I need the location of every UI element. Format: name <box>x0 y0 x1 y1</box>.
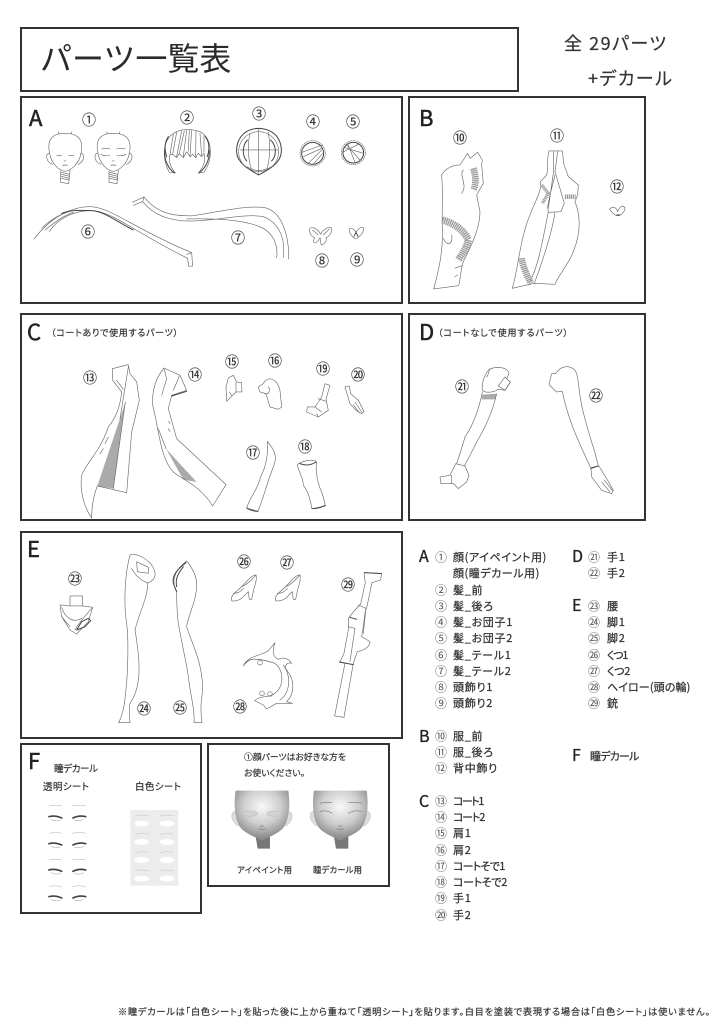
legend: D: 手1 <box>607 549 626 565</box>
icon: sleeve 2 <box>297 460 325 509</box>
legend: C: コート1 <box>453 793 485 809</box>
icon: back ornament <box>610 206 625 216</box>
icon: coat 1 <box>81 365 139 518</box>
icon: white sheet <box>130 810 178 886</box>
legend: E: 腰 <box>607 598 619 614</box>
footnote: ※瞳デカールは「白色シート」を貼った後に上から重ねて「透明シート」を貼ります。白目を塗装で表現する場合は「白色シート」は使いません。 <box>118 1004 710 1018</box>
icon: head eye paint <box>232 791 292 849</box>
part numbers C: ⑮ <box>225 352 239 372</box>
panel: B <box>409 97 645 303</box>
legend: A: ⑨ <box>435 694 447 712</box>
icon: hand 2 <box>345 386 364 414</box>
panel: face choice <box>208 744 389 886</box>
legend: A: 髪_前 <box>453 582 483 598</box>
legend: D: ㉑ <box>588 548 600 566</box>
icon: halo <box>243 643 293 709</box>
panel: F: F <box>28 744 40 776</box>
part numbers C: ⑱ <box>298 437 312 457</box>
legend: E <box>572 592 691 712</box>
legend: B: ⑫ <box>435 760 447 776</box>
legend: C: ⑯ <box>435 842 447 858</box>
legend: A <box>419 543 547 712</box>
legend: C: コートそで1 <box>453 858 506 874</box>
icon: tail 2 <box>132 197 289 259</box>
legend: C: ⑮ <box>435 824 447 842</box>
part numbers C <box>83 351 365 463</box>
legend: C: ⑰ <box>435 858 447 874</box>
icon: rifle <box>335 573 382 717</box>
parts total: +デカール <box>588 65 672 91</box>
part numbers A: ④ <box>306 112 320 132</box>
legend: D: 手2 <box>607 565 626 581</box>
part numbers E: ㉕ <box>173 698 187 718</box>
part numbers E: ㉗ <box>280 553 294 573</box>
icon: sleeve 1 <box>247 441 275 511</box>
part numbers B: ⑩ <box>453 128 467 148</box>
icon: shoe 2 <box>275 575 300 601</box>
heading: white sheet: 白色シート <box>135 779 181 793</box>
part numbers C: ⑰ <box>246 443 260 463</box>
legend: E: ㉕ <box>588 630 600 646</box>
legend: C: 手1 <box>453 890 472 906</box>
legend: C: ⑳ <box>435 906 447 924</box>
icon: dress back <box>512 151 579 288</box>
legend: A: A <box>419 543 429 567</box>
legend: E: 脚1 <box>607 614 626 630</box>
panel: C: C <box>27 315 41 347</box>
part numbers C: ⑭ <box>188 365 202 385</box>
legend: A: ⑥ <box>435 646 447 664</box>
legend: A: 顔(瞳デカール用) <box>453 565 540 581</box>
part numbers C: ⑬ <box>83 368 97 388</box>
legend: A: 髪_お団子2 <box>453 630 513 646</box>
drawings D <box>440 367 613 494</box>
legend: E: ㉙ <box>588 694 600 712</box>
legend: C: ⑬ <box>435 792 447 810</box>
part numbers C: ⑲ <box>316 359 330 379</box>
panel: C <box>21 314 402 520</box>
legend: C: ⑭ <box>435 808 447 826</box>
part numbers D <box>455 377 603 406</box>
part numbers D: ㉑ <box>455 377 469 397</box>
subtitle D: （コートなしで使用するパーツ） <box>438 326 568 339</box>
part numbers A: ⑦ <box>231 228 245 248</box>
icon: transparent sheet eyes <box>49 805 86 901</box>
legend: A: ⑧ <box>435 678 447 696</box>
part numbers A: ⑧ <box>315 251 329 271</box>
icon: leg 2 <box>173 561 203 723</box>
legend: B <box>419 723 498 776</box>
icon: arm 1 <box>440 367 510 489</box>
legend: E: ㉘ <box>588 678 600 696</box>
icon: head ornament 2 <box>349 227 363 238</box>
drawings E <box>60 555 382 723</box>
legend: C: C <box>419 788 429 812</box>
legend: C: コートそで2 <box>453 874 508 890</box>
legend: E: ㉗ <box>588 662 600 680</box>
legend: F: F <box>572 742 581 766</box>
part numbers B <box>453 126 624 197</box>
legend: A: ③ <box>435 598 447 614</box>
legend: B: B <box>419 723 430 747</box>
note text: ①顔パーツはお好きな方を <box>244 750 346 763</box>
icon: head ornament 1 <box>310 227 332 245</box>
legend: B: 背中飾り <box>453 760 498 776</box>
panel: E <box>21 532 402 738</box>
legend: A: 頭飾り1 <box>453 679 493 695</box>
legend: B: ⑩ <box>435 728 447 744</box>
legend: A: 髪_お団子1 <box>453 614 513 630</box>
note text <box>244 750 346 779</box>
legend: D: ㉒ <box>588 564 600 582</box>
legend: B: 服_前 <box>453 728 483 744</box>
legend: A: 髪_テール2 <box>453 663 512 679</box>
parts total: 全 29パーツ <box>564 30 666 56</box>
heading: transparent sheet: 透明シート <box>43 779 89 793</box>
part numbers D: ㉒ <box>589 386 603 406</box>
legend: C: コート2 <box>453 809 486 825</box>
legend: B: 服_後ろ <box>453 744 494 760</box>
panel: B: B <box>419 101 433 133</box>
icon: arm 2 <box>549 367 613 494</box>
icon: coat 2 <box>153 368 226 506</box>
note text: お使いください。 <box>244 766 305 779</box>
part numbers E: ㉘ <box>233 697 247 717</box>
legend: E: ヘイロー(頭の輪) <box>607 679 691 695</box>
legend: A: ② <box>435 582 447 598</box>
legend: A: ⑦ <box>435 662 447 680</box>
heading: decal: 瞳デカール <box>54 761 99 775</box>
drawings C <box>81 365 364 518</box>
part numbers A: ⑤ <box>346 112 360 132</box>
part numbers B: ⑫ <box>610 177 624 197</box>
legend: C <box>419 788 508 924</box>
legend: B: ⑪ <box>435 744 447 760</box>
icon: dress front <box>434 152 483 289</box>
part numbers A: ⑨ <box>350 250 364 270</box>
part numbers E <box>68 552 355 719</box>
part numbers A: ① <box>82 110 96 130</box>
icon: tail 1 <box>34 207 193 266</box>
legend: C: 手2 <box>453 907 472 923</box>
panel: A <box>21 97 402 303</box>
panel: D <box>409 314 645 520</box>
legend: E: 銃 <box>607 695 619 711</box>
part numbers A <box>81 104 364 271</box>
panel: D: D <box>419 315 434 347</box>
part numbers C: ⑯ <box>268 351 282 371</box>
icon: shoulder 1 <box>226 375 242 401</box>
legend: D <box>572 543 626 582</box>
legend: F <box>572 742 640 766</box>
legend: E: ㉓ <box>588 598 600 614</box>
part numbers A: ③ <box>252 104 266 124</box>
panel: E: E <box>27 532 40 564</box>
legend: A: ④ <box>435 614 447 630</box>
icon: back hair <box>237 128 281 175</box>
title box: パーツ一覧表 <box>40 34 231 80</box>
part numbers E: ㉙ <box>341 575 355 595</box>
panel: A: A <box>29 101 43 133</box>
legend: E: くつ2 <box>606 663 631 679</box>
legend: A: 頭飾り2 <box>453 695 493 711</box>
icon: front hair <box>164 130 210 173</box>
part numbers A: ⑥ <box>81 222 95 242</box>
legend: E: 脚2 <box>607 630 626 646</box>
icon: shoe 1 <box>231 575 256 601</box>
icon: hair bun 2 <box>341 141 365 165</box>
legend: A: ⑤ <box>435 630 447 646</box>
icon: hair bun 1 <box>300 141 325 166</box>
part numbers E: ㉓ <box>68 569 82 589</box>
part numbers A: ② <box>180 108 194 128</box>
legend: A: 顔(アイペイント用) <box>453 549 547 565</box>
legend: C: 肩2 <box>453 842 472 858</box>
legend: C: 肩1 <box>453 825 472 841</box>
caption: eye decal: 瞳デカール用 <box>313 864 362 876</box>
legend: A: ① <box>435 548 447 566</box>
parts total <box>564 30 672 91</box>
legend: C: ⑲ <box>435 890 447 906</box>
icon: shoulder 2 <box>258 379 282 409</box>
legend: E: ㉔ <box>588 614 600 630</box>
legend: E: E <box>572 592 581 616</box>
title box <box>21 28 518 91</box>
legend: F: 瞳デカール <box>590 748 640 764</box>
legend: D: D <box>572 543 583 567</box>
icon: face decal <box>95 132 132 184</box>
subtitle C: （コートありで使用するパーツ） <box>51 326 178 339</box>
icon: head eye decal <box>310 791 370 849</box>
legend: A: 髪_後ろ <box>453 598 494 614</box>
legend: C: ⑱ <box>435 874 447 890</box>
caption: eye paint: アイペイント用 <box>237 864 292 876</box>
icon: leg 1 <box>119 555 155 723</box>
drawings B <box>434 151 625 289</box>
icon: face eye paint <box>47 132 84 184</box>
legend: A: 髪_テール1 <box>453 647 512 663</box>
icon: hand 1 <box>307 384 330 417</box>
part numbers E: ㉖ <box>237 552 251 572</box>
panel: F <box>21 744 201 913</box>
legend: E: くつ1 <box>606 647 629 663</box>
part numbers B: ⑪ <box>550 126 564 146</box>
legend: E: ㉖ <box>588 646 600 664</box>
icon: waist <box>60 596 93 634</box>
drawings A <box>34 128 365 266</box>
part numbers C: ⑳ <box>351 365 365 385</box>
part numbers E: ㉔ <box>137 699 151 719</box>
